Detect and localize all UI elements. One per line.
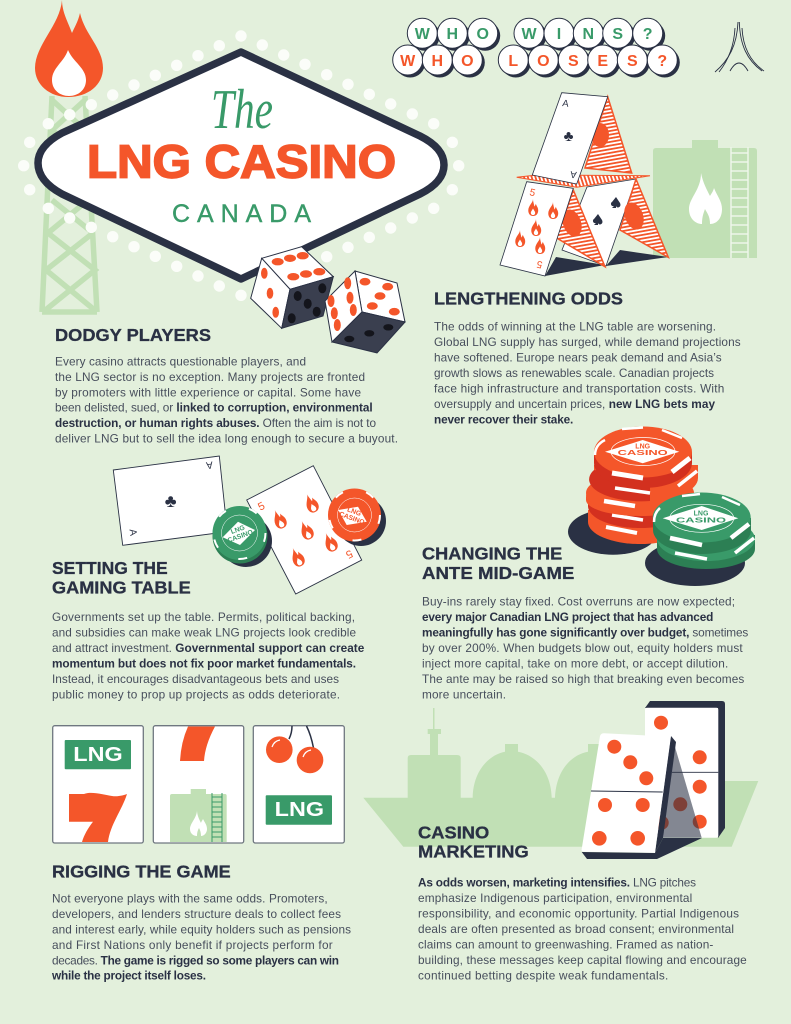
sign marquee lights <box>18 30 464 301</box>
title: LNG Casino: LNG CASINO <box>87 136 396 188</box>
five of flames card: 5 <box>535 258 544 270</box>
body text: Buy-ins rarely stay fixed. Cost overruns are now expected; <box>422 595 735 609</box>
row two: who loses: W <box>400 53 416 70</box>
row two: who loses: L <box>508 53 518 70</box>
five card: 5 <box>344 547 354 560</box>
front domino <box>582 733 676 853</box>
ace card: A <box>127 528 138 537</box>
body text: Not everyone plays with the same odds. Promoters, <box>52 892 328 906</box>
body text: have softened. Europe nears peak demand and Asia’s <box>434 350 722 364</box>
icon: flame <box>35 0 103 97</box>
ace of clubs card: ♣ <box>564 128 574 145</box>
slot machine reels <box>53 726 344 843</box>
body text: building, these messages keep capital flowing and encourage <box>418 953 747 967</box>
row one: who wins: W <box>521 26 537 43</box>
green chip: LNG <box>230 524 246 536</box>
heading: CASINO <box>418 822 489 842</box>
title: Canada: CANADA <box>172 200 311 228</box>
orange chip: CASINO <box>338 511 365 527</box>
body text: Governments set up the table. Permits, political backing, <box>52 610 355 624</box>
body text: and subsidies can make weak LNG projects look credible <box>52 626 356 640</box>
illustration: LNG tanker ship <box>363 708 758 847</box>
row two: who loses: E <box>597 53 608 70</box>
body text: Every casino attracts questionable players, and <box>55 354 306 368</box>
illustration: dominoes <box>582 701 725 859</box>
body text: As odds worsen, marketing intensifies. LNG pitches <box>418 876 696 890</box>
heading: DODGY PLAYERS <box>55 325 211 345</box>
section: rigging the game <box>51 861 351 983</box>
body text <box>55 354 398 445</box>
ace of clubs card: A <box>569 168 577 180</box>
illustration: house of cards <box>500 93 668 276</box>
shadow <box>545 250 668 276</box>
cherries <box>266 726 323 773</box>
heading: ANTE MID-GAME <box>422 563 574 583</box>
icon: LNG tank behind cards <box>653 140 757 258</box>
striped upper back card <box>585 97 632 173</box>
section: changing the ante mid-game <box>422 543 748 702</box>
body text: claims can amount to greenwashing. Framed as nation- <box>418 937 713 951</box>
body text: never recover their stake. <box>434 412 573 426</box>
seven <box>69 793 127 842</box>
orange stack shadow <box>568 509 658 555</box>
green stack shadow <box>645 540 745 586</box>
body text: and interest early, while equity holders such as pensions <box>52 922 351 936</box>
heading <box>422 543 574 583</box>
section: casino marketing <box>418 822 747 983</box>
who wins who loses chips <box>393 18 680 78</box>
row one: who wins: ? <box>643 26 653 43</box>
row two: who loses: ? <box>657 53 667 70</box>
body text <box>434 320 741 426</box>
body text: developers, and lenders structure deals to collect fees <box>52 907 341 921</box>
body text: and attract investment. Governmental support can create <box>52 641 365 655</box>
body text: the LNG sector is no exception. Many projects are fronted <box>55 370 365 384</box>
body text: The ante may be raised so high that breaking even becomes <box>422 672 744 686</box>
body text: meaningfully has gone significantly over budget, sometimes <box>422 626 748 640</box>
body text <box>51 892 351 983</box>
body text: Instead, it encourages disadvantageous bets and uses <box>52 672 339 686</box>
green stack: LNG <box>694 510 709 518</box>
row one: who wins: N <box>583 26 594 43</box>
body text: more uncertain. <box>422 688 506 702</box>
body text: responsibility, and economic opportunity. Partial Indigenous <box>418 907 739 921</box>
tank <box>170 789 227 842</box>
row two: who loses: O <box>537 53 550 70</box>
section: dodgy players <box>55 325 398 445</box>
body text: momentum but does not fix poor market fundamentals. <box>52 657 356 671</box>
ace of clubs card: A <box>562 98 570 110</box>
body text: by over 200%. When budgets blow out, equity holders must <box>422 641 743 655</box>
row one: who wins <box>407 18 665 51</box>
green stack <box>653 492 755 569</box>
heading: LENGTHENING ODDS <box>434 288 623 308</box>
body text: every major Canadian LNG project that has advanced <box>422 610 713 624</box>
ladder <box>731 147 748 258</box>
back domino <box>645 701 725 838</box>
body text: oversupply and uncertain prices, new LNG bets may <box>434 397 715 411</box>
body text: face high infrastructure and transportation costs. With <box>434 381 724 395</box>
heading: GAMING TABLE <box>52 578 191 598</box>
body text <box>52 610 365 702</box>
orange chip <box>328 488 386 546</box>
row one: who wins: O <box>476 26 489 43</box>
icon: flare tower <box>42 96 97 312</box>
ace card: A <box>205 459 213 470</box>
flame <box>689 173 722 224</box>
body text: deliver LNG but to sell the idea long enough to secure a buyout. <box>55 431 398 445</box>
body text: The odds of winning at the LNG table are worsening. <box>434 320 716 334</box>
five card: 5 <box>256 500 267 514</box>
striped lower right card <box>620 179 668 257</box>
orange chip: LNG <box>346 506 362 518</box>
reel two <box>153 726 244 843</box>
five of flames card: 5 <box>528 187 537 199</box>
body text: decades. The game is rigged so some players can win <box>52 953 339 967</box>
row two: who loses <box>393 45 680 78</box>
body text: inject more capital, take on more debt, or accept dilution. <box>422 657 728 671</box>
row two: who loses: S <box>627 53 638 70</box>
LNG badge: LNG <box>275 799 324 821</box>
illustration: cards and chips <box>113 456 386 594</box>
heading: SETTING THE <box>52 558 168 578</box>
section: setting the gaming table <box>52 558 365 702</box>
orange stack: LNG <box>635 443 651 450</box>
body text: deals are often presented as broad consent; environmental <box>418 922 734 936</box>
reel three <box>253 726 344 843</box>
die two <box>325 271 405 353</box>
body text: by promoters with little experience or capital. Some have <box>55 385 361 399</box>
green chip: CASINO <box>227 529 254 545</box>
domino shadow <box>663 737 702 838</box>
body text: while the project itself loses. <box>51 969 206 983</box>
five card <box>247 466 362 594</box>
heading: CHANGING THE <box>422 543 562 563</box>
heading <box>418 822 529 862</box>
striped horizontal card <box>517 175 650 187</box>
section: lengthening odds <box>434 288 741 426</box>
ace card: ♣ <box>165 491 177 511</box>
heading <box>52 558 191 598</box>
white spade card <box>562 179 636 266</box>
ace of clubs card <box>532 93 608 184</box>
body text: been delisted, sued, or linked to corruption, environmental <box>55 401 373 415</box>
striped lower middle card <box>557 190 605 267</box>
body text <box>422 595 748 702</box>
row one: who wins: S <box>612 26 623 43</box>
orange stack <box>586 426 698 544</box>
row one: who wins: H <box>447 26 458 43</box>
body text: growth slows as renewables scale. Canadian projects <box>434 366 714 380</box>
row two: who loses: O <box>461 53 474 70</box>
seven <box>180 726 215 761</box>
sign: the LNG casino <box>38 52 444 279</box>
illustration: chip stacks <box>568 426 755 586</box>
row two: who loses: H <box>432 53 443 70</box>
green chip <box>212 506 272 567</box>
green stack: CASINO <box>676 516 726 524</box>
body text: and First Nations only benefit if projects perform for <box>52 938 333 952</box>
row two: who loses: S <box>568 53 579 70</box>
row one: who wins: I <box>557 26 561 43</box>
ace card <box>113 456 227 545</box>
five of flames card <box>500 182 573 276</box>
title: The: The <box>211 79 273 141</box>
die one <box>251 247 333 328</box>
body text: public money to prop up projects as odds deteriorate. <box>52 688 340 702</box>
body text: Global LNG supply has surged, while demand projections <box>434 335 741 349</box>
domino base <box>582 838 702 859</box>
body text <box>418 876 747 983</box>
reel one <box>53 726 143 843</box>
dice <box>251 247 405 353</box>
heading: MARKETING <box>418 842 529 862</box>
body text: emphasize Indigenous participation, environmental <box>418 891 692 905</box>
body text: destruction, or human rights abuses. Often the aim is not to <box>55 416 376 430</box>
icon: publisher logo <box>715 22 764 72</box>
heading: RIGGING THE GAME <box>52 861 231 881</box>
orange stack: CASINO <box>618 448 668 457</box>
body text: continued betting despite weak fundamentals. <box>418 969 668 983</box>
row one: who wins: W <box>415 26 431 43</box>
LNG badge: LNG <box>73 744 123 766</box>
